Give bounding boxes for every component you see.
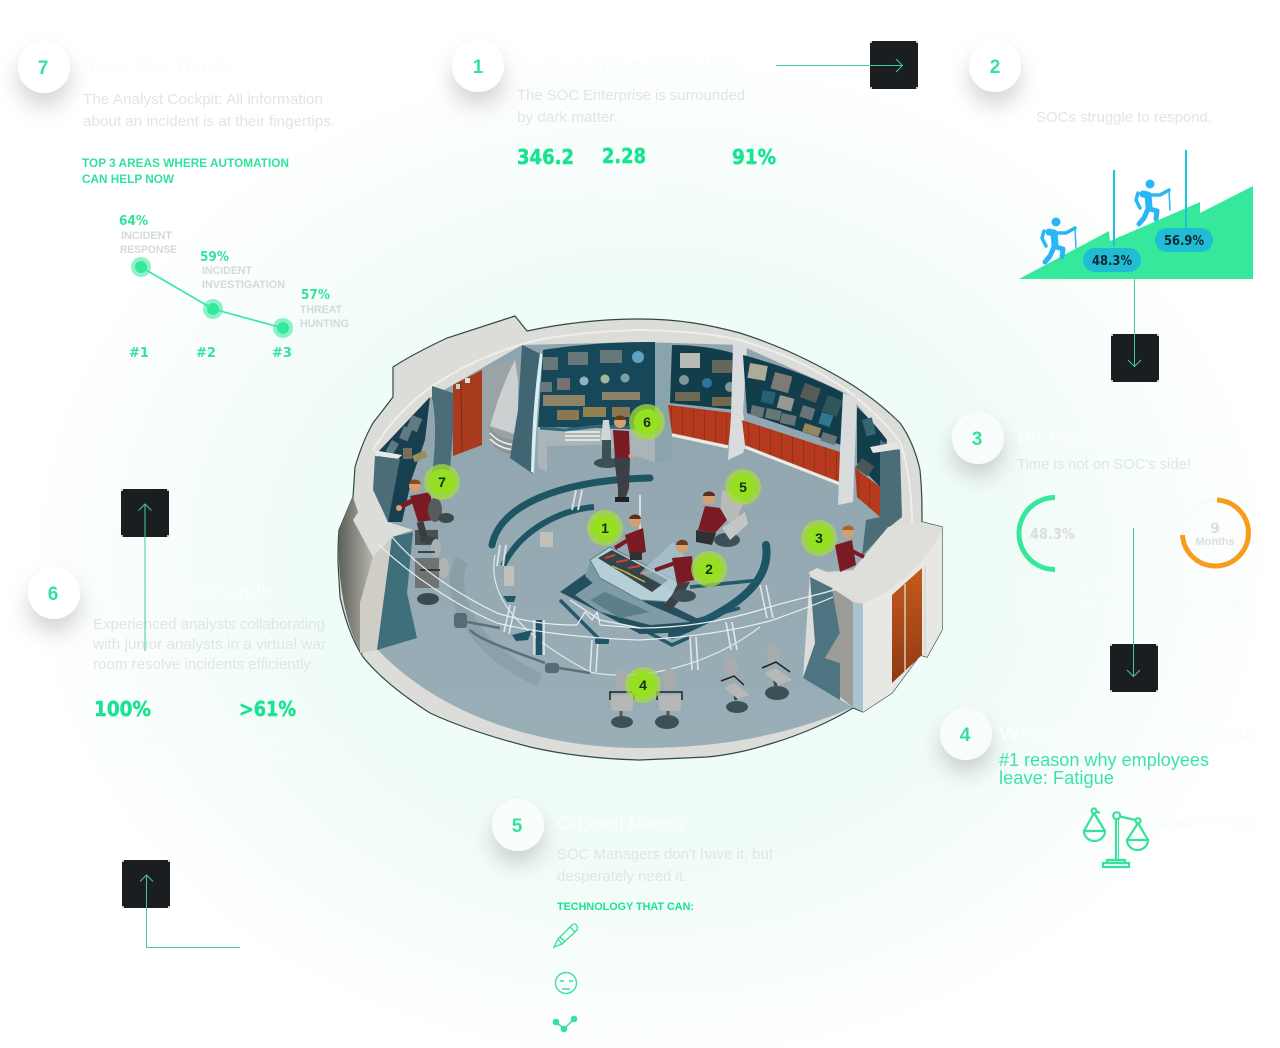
body 1: The SOC Enterprise is surrounded (517, 87, 745, 104)
body 1: by dark matter. (517, 109, 618, 126)
person 6 (613, 416, 634, 502)
floor (375, 342, 902, 748)
railing lower line (377, 543, 833, 640)
rail struts back (497, 490, 640, 586)
right block (863, 530, 942, 712)
fourth console displays (855, 417, 876, 476)
marker 4 (625, 667, 661, 703)
faint stat labels 6: GEOGRAPHICALLY (239, 736, 344, 750)
mountain (1019, 186, 1253, 279)
stats 1: 346.2 (517, 145, 574, 169)
badge 2: 2 (990, 57, 1000, 78)
panel 3: ground crawling (952, 412, 1250, 625)
console base stripes (538, 426, 655, 472)
centre pillar (655, 343, 672, 462)
chart heading: CAN HELP NOW (82, 172, 175, 186)
body 7 (83, 91, 335, 130)
stats 6 (94, 697, 296, 721)
line chart: 57% (301, 288, 330, 303)
body 6: Experienced analysts collaborating (93, 616, 325, 633)
marker 3: 3 (815, 530, 823, 546)
left teal block lower (377, 532, 417, 650)
railing upper line (392, 537, 840, 628)
marker 7 (424, 464, 460, 500)
third console displays (747, 363, 843, 445)
red door (453, 370, 482, 456)
badge 1 (452, 40, 504, 92)
floor ring (457, 560, 540, 680)
line chart: #2 (196, 346, 216, 361)
badge 4: 4 (960, 725, 971, 746)
floor struts and pedestals (454, 585, 773, 673)
red seats 3 (855, 468, 880, 517)
stats 6: 100% (94, 697, 151, 721)
donut 9 months: 9 (1210, 521, 1220, 537)
body 3: Time is not on SOC's side! (1017, 456, 1191, 473)
panel 6: war room (28, 567, 344, 765)
marker 1: 1 (601, 520, 609, 536)
highlighted body 4: #1 reason why employees (999, 750, 1209, 770)
badge 7 (18, 41, 70, 93)
badge 7: 7 (38, 58, 48, 79)
person 3 (835, 526, 864, 572)
left ledge (373, 450, 402, 459)
chart heading: TOP 3 AREAS WHERE AUTOMATION (82, 156, 289, 170)
faint stat labels 1 (517, 170, 828, 200)
body 6 (92, 616, 326, 673)
body 2: SOCs struggle to respond. (1036, 109, 1212, 126)
donut 48.3%: 48.3% (1030, 525, 1075, 543)
line chart: INCIDENT (202, 265, 252, 277)
panel 2: uphill (969, 40, 1253, 279)
faint stat labels 6: SPEND OUT (239, 721, 298, 735)
body 6: room resolve incidents efficiently. (93, 656, 314, 673)
line chart: INCIDENT (121, 230, 172, 242)
icon: network (553, 1016, 577, 1032)
outer hull (338, 316, 942, 760)
faint labels 4: MANAGERS (1000, 816, 1058, 830)
marker 2 (691, 551, 727, 587)
second console wall (670, 345, 737, 410)
faint stat labels 1: PERCENTAGE (732, 170, 810, 184)
chair fourth middle (655, 668, 682, 729)
connector arrow down 1 (1111, 279, 1159, 382)
third console wall (743, 355, 847, 447)
label: skills gap: ADDRESS WORKFORCE SKILLS GAP (588, 933, 783, 947)
red seats 2 (742, 420, 843, 482)
body 1 (517, 87, 745, 126)
faint stat labels 6: OF SOCs NEED (94, 721, 174, 735)
right teal wall (862, 440, 902, 556)
alcove steps (490, 427, 518, 455)
technology subheading: TECHNOLOGY THAT CAN: (557, 901, 694, 913)
marker 7: 7 (438, 474, 446, 490)
blue strip (853, 602, 863, 712)
bridge illustration (338, 316, 942, 760)
stats 1: 2.28 (602, 144, 646, 168)
door frame and curved alcove (482, 358, 522, 465)
pill 56.9% (1155, 228, 1213, 252)
heading 5: C-Level Needs (557, 814, 685, 834)
badge 5: 5 (512, 816, 523, 837)
centre dais (560, 566, 700, 634)
faint labels 3: FULL-TRAINED (1166, 611, 1250, 625)
pill 56.9%: 56.9% (1164, 234, 1204, 249)
donut 9 months (1182, 500, 1248, 566)
door panels (456, 378, 470, 452)
faint labels 4: THOUGHT (1000, 832, 1047, 846)
badge 2 (969, 40, 1021, 92)
faint labels 3: MODE (1017, 611, 1050, 625)
body 7: about an incident is at their fingertips. (83, 113, 335, 130)
heading 4: Whack & Get Up Burnout (999, 724, 1258, 744)
marker 6 (629, 404, 665, 440)
stats 6: >61% (239, 697, 296, 721)
white pillar 3 (838, 393, 857, 505)
chair fourth left (610, 668, 634, 728)
right teal shadow wall (803, 577, 840, 700)
donut 9 months: Months (1196, 536, 1234, 548)
faint stat labels 6: FIND EXPERIENCED (94, 736, 204, 750)
chart heading (82, 156, 289, 186)
marker 1 (587, 510, 623, 546)
left teal block (373, 456, 400, 522)
heading 3: Hit the Ground Crawling (1017, 427, 1240, 447)
faint labels 3: FIRE-FIGHTING (1017, 595, 1097, 609)
faint labels 3 (1017, 579, 1250, 625)
left white strip (360, 537, 392, 653)
faint stat labels 1: DAYS TO RESOLVE (602, 170, 709, 184)
marker 2: 2 (705, 561, 713, 577)
inner floor rail ellipse (494, 555, 760, 675)
heading 7: Hyper-Real Threats (83, 56, 235, 76)
marker 5: 5 (739, 479, 747, 495)
left console displays (386, 415, 428, 462)
right ledge and block top (808, 522, 942, 604)
pill 48.3% (1083, 248, 1141, 272)
connector arrow up 2 (122, 860, 240, 948)
white pillar 2 (728, 343, 747, 460)
marker 4: 4 (639, 677, 647, 693)
lower rail bars (560, 580, 760, 645)
faint stat labels 6: DISPERSED (239, 751, 305, 765)
highlighted body 4 (999, 750, 1209, 788)
door seam and frame (905, 566, 925, 671)
right tube rail (672, 545, 767, 635)
hiker one (1042, 218, 1076, 262)
faint labels 4: SHIFT (1000, 847, 1033, 861)
body 5: desperately need it. (557, 868, 687, 885)
centre pedestal (594, 420, 620, 468)
left chairs (415, 530, 449, 605)
left hull shaded wall (339, 497, 373, 657)
faint stat labels 1: DAYS TO ID (517, 186, 579, 200)
panel 5: c-level needs (492, 799, 783, 1032)
alcove white curve (490, 360, 518, 435)
donut 48.3% (1019, 498, 1091, 570)
panel 7: analyst cockpit (18, 41, 349, 361)
connector arrow right (776, 41, 918, 89)
main console displays (540, 350, 644, 420)
line chart: INVESTIGATION (202, 279, 285, 291)
faint stat labels 6: ANALYSTS (94, 751, 156, 765)
marker 5 (725, 469, 761, 505)
marker 6: 6 (643, 414, 651, 430)
label: reduce burnout: REDUCE BURNOUT (590, 974, 689, 988)
person 2 (655, 540, 696, 612)
stats 1: 91% (732, 145, 776, 169)
panel 1: black hole (452, 40, 828, 200)
icon: scales (1084, 808, 1148, 867)
body 5 (557, 846, 774, 885)
label: automate: AUTOMATE (590, 1016, 666, 1030)
badge 6 (28, 567, 80, 619)
heading 6: War Room Struggle (93, 581, 272, 601)
line chart: THREAT (300, 304, 342, 316)
person 5 with chair (696, 490, 748, 547)
floor step 2 (745, 447, 840, 484)
body 7: The Analyst Cockpit: All information (83, 91, 323, 108)
line chart: 64% (119, 214, 148, 229)
bright pillar edge (531, 353, 543, 473)
badge 5 (492, 799, 544, 851)
badge 3: 3 (972, 429, 982, 450)
panel 4: burnout (940, 708, 1260, 867)
stats 1 (517, 144, 776, 169)
body 6: with junior analysts in a virtual war (92, 636, 326, 653)
line chart: #1 (129, 346, 149, 361)
main console wall (538, 342, 655, 430)
highlighted body 4: leave: Fatigue (999, 768, 1114, 788)
floor step 1 (672, 435, 728, 447)
chair right one (721, 657, 750, 713)
fourth console wall (857, 407, 887, 487)
marker 3 (801, 520, 837, 556)
faint labels 3: RECRUIT AND (1162, 595, 1250, 609)
second console displays (675, 353, 735, 406)
connector arrow up 1 (121, 489, 169, 651)
icon: pencil (554, 924, 577, 947)
faint labels 4: ANALYSTS SAY (1155, 816, 1260, 830)
chair right two (762, 643, 792, 700)
faint labels 3: ACTIVE CONSTANT (1017, 579, 1118, 593)
faint labels 3: TO REPLACE (1196, 579, 1250, 593)
badge 6: 6 (48, 584, 58, 605)
line chart: #3 (272, 346, 292, 361)
inner tube rail (503, 507, 594, 566)
faint labels 4 (1000, 816, 1260, 861)
badge 1: 1 (473, 57, 484, 78)
line chart: 59% (200, 250, 229, 265)
line chart: HUNTING (300, 318, 349, 330)
right divider (870, 442, 900, 453)
icon: tired face (556, 972, 576, 994)
hiker two (1136, 180, 1170, 224)
badge 3 (952, 412, 1004, 464)
line chart (119, 214, 349, 361)
back tube rail (492, 478, 650, 545)
faint stat labels 1: AVERAGE (517, 170, 579, 184)
inner rim light band (373, 330, 912, 523)
red seats 1 (668, 405, 733, 445)
left console panel (378, 397, 430, 522)
body 5: SOC Managers don't have it, but (557, 846, 774, 863)
main console (585, 542, 690, 602)
faint stat labels 1: DARK MATTER (732, 186, 828, 200)
connector line and arrow down 2 (1110, 528, 1158, 692)
teal main pillar (510, 345, 543, 474)
badge 4 (940, 708, 992, 760)
person 7 (396, 480, 454, 540)
left rim top (353, 490, 413, 557)
pill 48.3%: 48.3% (1092, 254, 1132, 269)
poles (1114, 150, 1186, 247)
heading 1: Sucked Into a Black Hole (517, 55, 742, 75)
grey column (825, 588, 853, 707)
orange door (892, 568, 922, 683)
person 1 (615, 514, 646, 560)
faint stat labels 1: INCIDENT (602, 186, 659, 200)
line chart: RESPONSE (120, 244, 177, 256)
faint stat labels 6 (94, 721, 344, 765)
left teal pillar (432, 386, 456, 474)
